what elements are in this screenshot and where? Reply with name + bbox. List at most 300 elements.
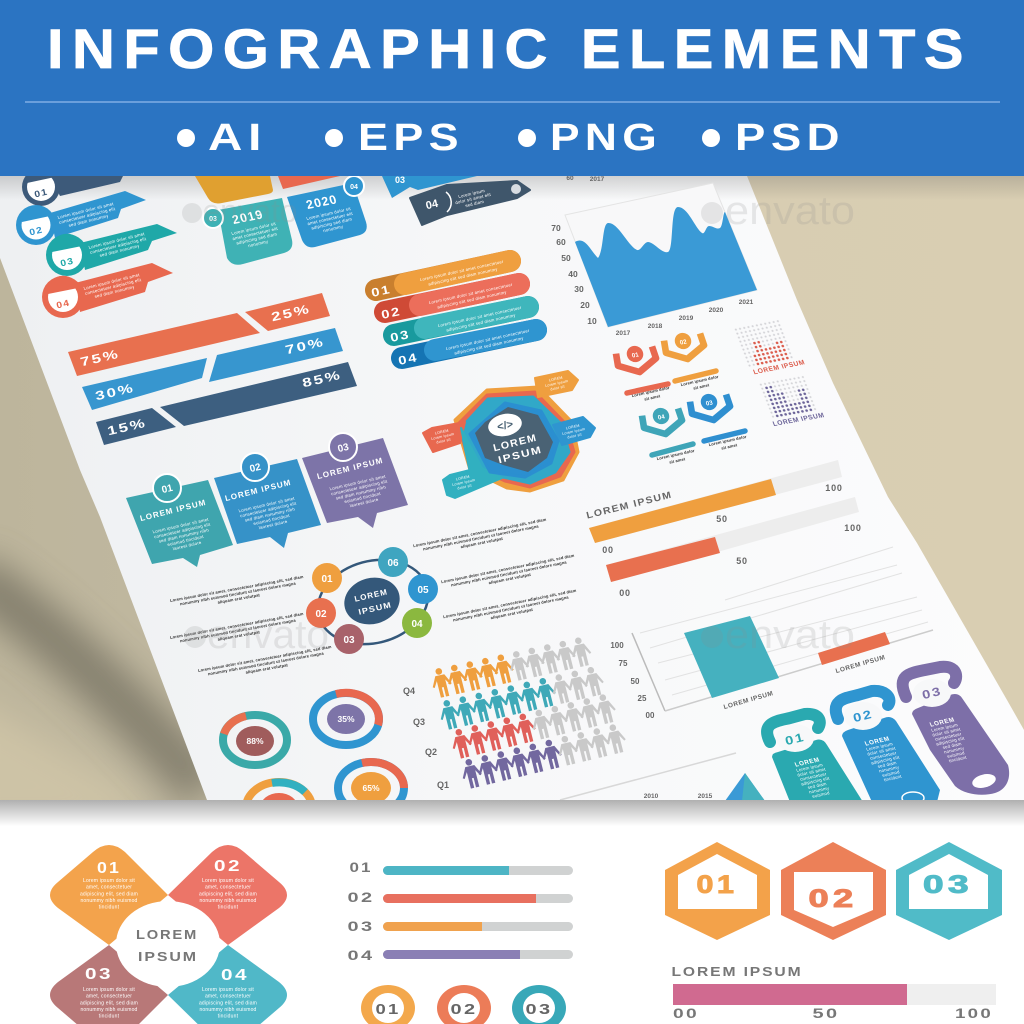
card 2019: 03 (209, 216, 217, 223)
petal 02: adipiscing elit, sed diam (199, 891, 257, 897)
text blocks: right paragraphs: Lorem ipsum dolor sit amet, consectetuer adipiscing elit, sed diam (413, 517, 547, 548)
right tag: dolor sit (567, 432, 582, 440)
panel: three callouts (126, 433, 408, 567)
callout 01: LOREM IPSUM (139, 498, 207, 523)
row Q1 (458, 722, 629, 790)
text blocks: left paragraphs (170, 574, 334, 683)
tag 04: consectetuer adipiscing elit (84, 277, 142, 296)
card red top (278, 176, 340, 189)
code icon (486, 411, 524, 439)
row 02 (348, 889, 573, 905)
nodes: 05 (417, 585, 429, 596)
pill 04 (397, 328, 536, 368)
pill 02: Lorem ipsum dolor sit amet consectetuer (428, 282, 513, 305)
callout 01 (126, 474, 233, 567)
pill 04: 04 (397, 350, 419, 368)
row 03 (348, 918, 573, 934)
watermarks: envato (207, 613, 329, 657)
pill 01: Lorem ipsum dolor sit amet consectetuer (419, 259, 504, 282)
text blocks: left paragraphs: aliquam erat volutpat (217, 592, 261, 605)
badge 03: 03 (705, 399, 714, 408)
text blocks: right paragraphs: aliquam erat volutpat (460, 536, 504, 549)
chart: purple dot grid (757, 374, 826, 428)
bar 25 percent (245, 293, 330, 331)
top tag: LOREM (549, 376, 563, 382)
row 01 (350, 859, 573, 875)
format list: PNG (550, 117, 662, 159)
ring 03: 03 (526, 1001, 552, 1018)
tab 03 (903, 667, 1009, 795)
text blocks: left paragraphs: nonummy nibh euismod tincidunt ut laoreet dolore magna (207, 651, 325, 676)
speech tag 04: Lorem ipsum (458, 188, 486, 199)
hexagon 01: 01 (696, 871, 738, 899)
scale: 100 (955, 1005, 993, 1021)
hexagon 02 (781, 842, 886, 940)
tab 01 (767, 714, 863, 802)
red layer (458, 392, 574, 487)
axis labels: 50 (631, 677, 640, 686)
panel: hexagon numbers (665, 842, 1002, 940)
nodes: 06 (387, 558, 399, 569)
y axis labels: 50 (561, 253, 571, 263)
hexagon title (492, 433, 544, 466)
x axis labels: 2021 (739, 299, 754, 306)
tag 03: consectetuer adipiscing elit (89, 236, 147, 255)
text blocks: right paragraphs: nonummy nibh euismod tincidunt ut laoreet dolore magna (450, 559, 568, 588)
y axis labels: 40 (568, 269, 578, 279)
scale labels: 50 (716, 514, 728, 524)
tag 04: sed diam nonummy (94, 284, 136, 299)
tab 02: euismod (881, 769, 901, 778)
badge 01: 01 (631, 351, 640, 360)
watermarks: envato (202, 193, 298, 229)
callout 02: euismod tincidunt (253, 513, 291, 526)
panel: people pictograms (403, 635, 629, 790)
panel: year cards (195, 176, 367, 265)
bar 75 percent (68, 313, 260, 376)
tag 03: 03 (59, 256, 75, 268)
panel: numbered pills (370, 259, 536, 368)
scale labels: 00 (602, 545, 614, 555)
tab 02 (836, 691, 940, 804)
panel: progress bars (585, 460, 862, 598)
chart: partial lower chart: 2015 (698, 793, 713, 800)
callout 01: 01 (161, 483, 174, 496)
row 04: 04 (348, 947, 374, 963)
card 2020: Lorem ipsum dolor sit (306, 206, 352, 221)
tag 03: Lorem ipsum dolor sit amet (88, 231, 146, 250)
donut 65 percent (338, 762, 404, 814)
speech tag 04: dolor sit amet elit (455, 192, 492, 205)
panel: top left tags (16, 166, 177, 318)
tab 02: dolor sit amet (866, 746, 897, 757)
panel: ring badges (361, 985, 566, 1024)
tag 03: sed diam nonummy (99, 243, 141, 258)
code icon: </> (496, 418, 514, 434)
donut 65 percent: 65% (362, 783, 380, 793)
format list: PSD (735, 117, 845, 159)
donut 88 percent: 88% (246, 736, 264, 746)
x axis labels: 2019 (679, 315, 694, 322)
centre circle: IPSUM (138, 949, 198, 964)
speech tag 03: 03 (395, 175, 405, 185)
bar captions: LOREM IPSUM (835, 654, 886, 675)
petal 04: tincidunt (218, 1014, 239, 1020)
bar 25 percent: 25% (270, 302, 312, 324)
card 2019: adipiscing sed diam (236, 231, 278, 246)
axis labels: 25 (638, 694, 647, 703)
pill 02: adipiscing elit sed diam nonummy (437, 289, 508, 310)
tab 01: nonummy (808, 785, 830, 795)
ring 01: 01 (376, 1001, 400, 1018)
nodes: 02 (315, 609, 327, 620)
bar 15 percent (96, 408, 176, 445)
callout 01: laoreet dolore (172, 540, 202, 551)
inner dark hexagon (475, 407, 553, 472)
tag 03 (46, 224, 177, 276)
callout 02: 02 (249, 462, 262, 475)
bar 30 percent (82, 358, 207, 410)
text blocks: right paragraphs: nonummy nibh euismod tincidunt ut laoreet dolore magna (452, 594, 570, 623)
teal layer (461, 397, 569, 483)
y axis labels: 70 (551, 223, 561, 233)
row Q4 (428, 635, 594, 699)
bar one (589, 460, 842, 543)
card yellow (195, 176, 273, 203)
pill 01 (370, 259, 510, 300)
pill 04: adipiscing elit sed diam nonummy (454, 335, 525, 356)
tab 02: tincidunt (883, 774, 903, 782)
panel: percentage bars (68, 293, 357, 445)
tab 02: consectetuer (869, 750, 898, 761)
tab 01: Lorem ipsum (795, 762, 824, 773)
badge captions: sit amet (721, 442, 738, 451)
card 2019: amet consectetuer elit (232, 226, 279, 241)
tab 01: LOREM (794, 757, 821, 769)
tab 02: nonummy (878, 764, 900, 774)
petal 01: Lorem ipsum dolor sit (83, 878, 135, 884)
bar 75 percent: 75% (79, 347, 121, 369)
tab 02: adipiscing elit (870, 755, 901, 766)
petal 04 (168, 945, 287, 1024)
top tag: Lorem ipsum (545, 379, 569, 388)
centre circle (116, 901, 220, 987)
callout 03: 03 (337, 442, 350, 455)
tab 01: consectetuer (799, 771, 828, 782)
tab 01: euismod (811, 790, 831, 799)
tab 03: tincidunt (948, 755, 968, 763)
ring 02: 02 (450, 1001, 478, 1018)
tag 02: 02 (28, 225, 44, 237)
pill 03: Lorem ipsum dolor sit amet consectetuer (437, 305, 522, 328)
chart: bar chart (610, 547, 933, 720)
speech tag 04 (410, 181, 530, 225)
tag 04 (42, 263, 173, 318)
bar captions (723, 654, 886, 711)
header shadow (0, 176, 1024, 200)
left tag (423, 422, 465, 452)
badge captions: sit amet (669, 456, 686, 465)
x axis labels: 2017 (590, 176, 605, 183)
card 2020: amet consectetuer elit (307, 211, 354, 226)
y axis labels: 10 (587, 316, 597, 326)
callout 03: Lorem ipsum dolor sit amet (329, 474, 387, 491)
badge captions: sit amet (693, 382, 710, 391)
petal 01: amet, consectetuer (86, 885, 132, 891)
pill 02 (380, 282, 519, 322)
badge captions: sit amet (644, 393, 661, 402)
petal 04: 04 (221, 967, 249, 984)
y axis labels: 60 (556, 237, 566, 247)
x axis labels: 2018 (648, 323, 663, 330)
format list (177, 117, 845, 159)
petal 02: nonummy nibh euismod (199, 898, 257, 904)
axis labels: 100 (610, 641, 624, 650)
text blocks: right paragraphs: Lorem ipsum dolor sit amet, consectetuer adipiscing elit, sed diam (443, 588, 577, 619)
callout 03: laoreet dolore (349, 497, 379, 508)
lower white panel (0, 800, 1024, 1024)
nodes: 03 (343, 635, 355, 646)
ring 01 (361, 985, 415, 1024)
callout 03 (302, 433, 408, 528)
heading: LOREM IPSUM (585, 490, 673, 522)
petal 01: 01 (97, 860, 121, 877)
format list: EPS (358, 117, 464, 159)
row 01: 01 (350, 859, 372, 875)
tab 03: dolor sit amet (931, 727, 962, 738)
pill 01: adipiscing elit sed diam nonummy (428, 266, 499, 287)
outer orange hexagon (455, 387, 578, 491)
axis labels: 75 (619, 659, 628, 668)
callout 02: Lorem ipsum dolor sit amet (238, 496, 296, 513)
bar 85 percent: 85% (301, 368, 343, 390)
chart: area chart (551, 175, 757, 337)
text blocks: left paragraphs: Lorem ipsum dolor sit amet, consectetuer adipiscing elit, sed diam (170, 574, 304, 603)
hexagon 03: 03 (923, 871, 973, 899)
text blocks: right paragraphs: Lorem ipsum dolor sit amet, consectetuer adipiscing elit, sed diam (441, 553, 575, 584)
tab 03: 03 (921, 684, 943, 702)
text blocks: right paragraphs: aliquam erat volutpat (490, 607, 534, 620)
chart: red dot grid (733, 317, 806, 377)
bar captions: LOREM IPSUM (723, 690, 774, 711)
petal 03: 03 (85, 966, 113, 983)
panel: four petal diagram (50, 845, 287, 1024)
centre hub: LOREM (354, 587, 389, 604)
tag 02: sed diam nonummy (68, 213, 110, 228)
lower teal tag (443, 428, 502, 498)
text blocks: left paragraphs: aliquam erat volutpat (245, 662, 289, 675)
callout 03: euismod tincidunt (344, 491, 382, 504)
scale (673, 1005, 993, 1021)
card 2020 (287, 176, 367, 247)
text blocks: right paragraphs: nonummy nibh euismod tincidunt ut laoreet dolore magna (422, 523, 540, 552)
badge captions: Lorem ipsum dolor (656, 448, 695, 461)
petal 03: tincidunt (99, 1014, 120, 1020)
tab 03: Lorem ipsum (930, 722, 959, 733)
tag 02: Lorem ipsum dolor sit amet (57, 201, 115, 220)
petal 02: 02 (214, 858, 242, 875)
speech tag 03 (382, 175, 477, 198)
centre hub: IPSUM (358, 600, 393, 617)
panel: hexagon badges (614, 329, 749, 467)
card 2020: adipiscing sed diam (311, 216, 353, 231)
hexagon title: LOREM (492, 433, 539, 454)
tag 01 (22, 166, 123, 206)
callout 02: sed diam nonummy nibh (244, 506, 296, 523)
tag 02 (16, 191, 146, 245)
ring 03 (512, 985, 566, 1024)
tab 03: adipiscing elit (935, 736, 966, 747)
watermarks: envato (725, 613, 855, 657)
watermarks (182, 189, 855, 657)
nodes (306, 547, 438, 654)
teal bar (684, 616, 779, 698)
bar 70 percent: 70% (284, 335, 326, 357)
quarter labels: Q2 (425, 747, 437, 757)
tab 02: sed diam (877, 760, 897, 769)
top tag (535, 371, 578, 397)
pill 03: adipiscing elit sed diam nonummy (446, 312, 517, 333)
petal 01 (50, 845, 168, 945)
petal 02: Lorem ipsum dolor sit (202, 878, 254, 884)
scale labels (602, 483, 862, 598)
pill 04: Lorem ipsum dolor sit amet consectetuer (445, 328, 530, 351)
tag 04: Lorem ipsum dolor sit amet (83, 272, 141, 291)
chart: partial lower chart: 2010 (644, 793, 659, 800)
x axis labels: 60 (566, 175, 574, 182)
lower teal tag: Lorem ipsum (452, 478, 476, 487)
callout 02: consectetuer adipiscing elit (239, 501, 297, 518)
left tag: Lorem ipsum (431, 432, 455, 441)
y axis labels: 30 (574, 284, 584, 294)
tab 01: sed diam (807, 781, 827, 790)
centre hub (339, 572, 405, 630)
petal 02: tincidunt (218, 905, 239, 911)
watermarks: envato (725, 189, 855, 233)
pill 03: 03 (389, 327, 411, 345)
left tag: LOREM (435, 429, 449, 435)
row 04 (348, 947, 573, 963)
chart: partial lower chart (560, 753, 765, 801)
badge captions: Lorem ipsum dolor (631, 385, 670, 398)
axis labels (610, 641, 655, 720)
paper shadow (0, 575, 205, 790)
tag 02: consectetuer adipiscing elit (58, 206, 116, 225)
text blocks: left paragraphs: nonummy nibh euismod tincidunt ut laoreet dolore magna (179, 618, 297, 643)
tab 03: sed diam (942, 741, 962, 750)
tab 02: 02 (852, 707, 874, 725)
text blocks: left paragraphs: aliquam erat volutpat (217, 629, 261, 642)
row Q2 (448, 692, 619, 760)
scale labels: 50 (736, 556, 748, 566)
tab 01: adipiscing elit (800, 776, 831, 787)
badge 04: 04 (657, 413, 666, 422)
bar 30 percent: 30% (94, 381, 136, 403)
scale: 50 (812, 1005, 840, 1021)
tab 03: consectetuer (934, 731, 963, 742)
x axis labels: 2020 (709, 307, 724, 314)
panel: donut charts (223, 693, 404, 834)
petal 02: amet, consectetuer (205, 885, 251, 891)
text blocks: left paragraphs: Lorem ipsum dolor sit amet, consectetuer adipiscing elit, sed diam (198, 644, 332, 673)
card 2019: Lorem ipsum dolor sit (231, 221, 277, 236)
axis labels: 00 (646, 711, 655, 720)
petal 04: adipiscing elit, sed diam (199, 1000, 257, 1006)
petal 01: nonummy nibh euismod (80, 898, 138, 904)
pill 01: 01 (370, 282, 392, 300)
hexagon 03 (896, 842, 1002, 940)
tab 01: 01 (784, 730, 806, 748)
nodes: 04 (411, 619, 423, 630)
callout 02: LOREM IPSUM (224, 478, 292, 503)
quarter labels: Q4 (403, 686, 415, 696)
tab 02: LOREM (864, 736, 891, 748)
petal 04: Lorem ipsum dolor sit (202, 987, 254, 993)
lower panel shadow (0, 800, 1024, 826)
text blocks: left paragraphs: Lorem ipsum dolor sit amet, consectetuer adipiscing elit, sed diam (170, 611, 304, 640)
background surface (0, 0, 1024, 800)
light floor area (0, 690, 150, 830)
scale labels: 00 (619, 588, 631, 598)
red bar (818, 632, 890, 665)
right tag (553, 417, 595, 445)
scale labels: 100 (825, 483, 843, 493)
petal 01: adipiscing elit, sed diam (80, 891, 138, 897)
panel: numbered tabs (767, 667, 1009, 804)
chart: red dot grid: LOREM IPSUM (752, 359, 806, 376)
pill 03 (389, 305, 528, 345)
left tag: dolor sit (436, 437, 451, 445)
quarter labels: Q3 (413, 717, 425, 727)
petal 01: tincidunt (99, 905, 120, 911)
x axis labels: 2017 (616, 330, 631, 337)
row 03: 03 (348, 918, 374, 934)
badge 02: 02 (679, 338, 688, 347)
badge captions: Lorem ipsum dolor (708, 434, 747, 447)
hexagon title: IPSUM (497, 445, 544, 466)
text blocks: left paragraphs: nonummy nibh euismod tincidunt ut laoreet dolore magna (179, 581, 297, 606)
panel: circular process (306, 547, 438, 656)
panel: central hexagon diagram (423, 371, 595, 498)
petal 03 (50, 945, 168, 1024)
header divider (25, 101, 1000, 103)
quarter labels (403, 686, 449, 790)
area series (575, 207, 757, 327)
fill (673, 984, 907, 1005)
petal 04: nonummy nibh euismod (199, 1007, 257, 1013)
petal 04: amet, consectetuer (205, 994, 251, 1000)
card 2019: nonummy (247, 239, 269, 248)
donut 88 percent (223, 715, 287, 765)
row 02: 02 (348, 889, 374, 905)
pill 02: 02 (380, 304, 402, 322)
hexagon 01 (665, 842, 770, 940)
chart: purple dot grid: LOREM IPSUM (772, 412, 826, 428)
badge captions: Lorem ipsum dolor (680, 374, 719, 387)
card 2020: 2020 (304, 192, 339, 212)
bar 85 percent (160, 362, 357, 426)
title: INFOGRAPHIC ELEMENTS (47, 17, 972, 80)
petal 03: Lorem ipsum dolor sit (83, 987, 135, 993)
bar 70 percent (209, 328, 343, 382)
top tag: dolor sit (550, 384, 565, 392)
speech tag 04: sed diam (465, 199, 485, 208)
badge label pills (627, 371, 745, 455)
lower teal tag: dolor sit (457, 483, 472, 491)
right tag: Lorem ipsum (562, 427, 586, 436)
y axis labels: 20 (580, 300, 590, 310)
panel: speech tags top centre (382, 175, 530, 225)
